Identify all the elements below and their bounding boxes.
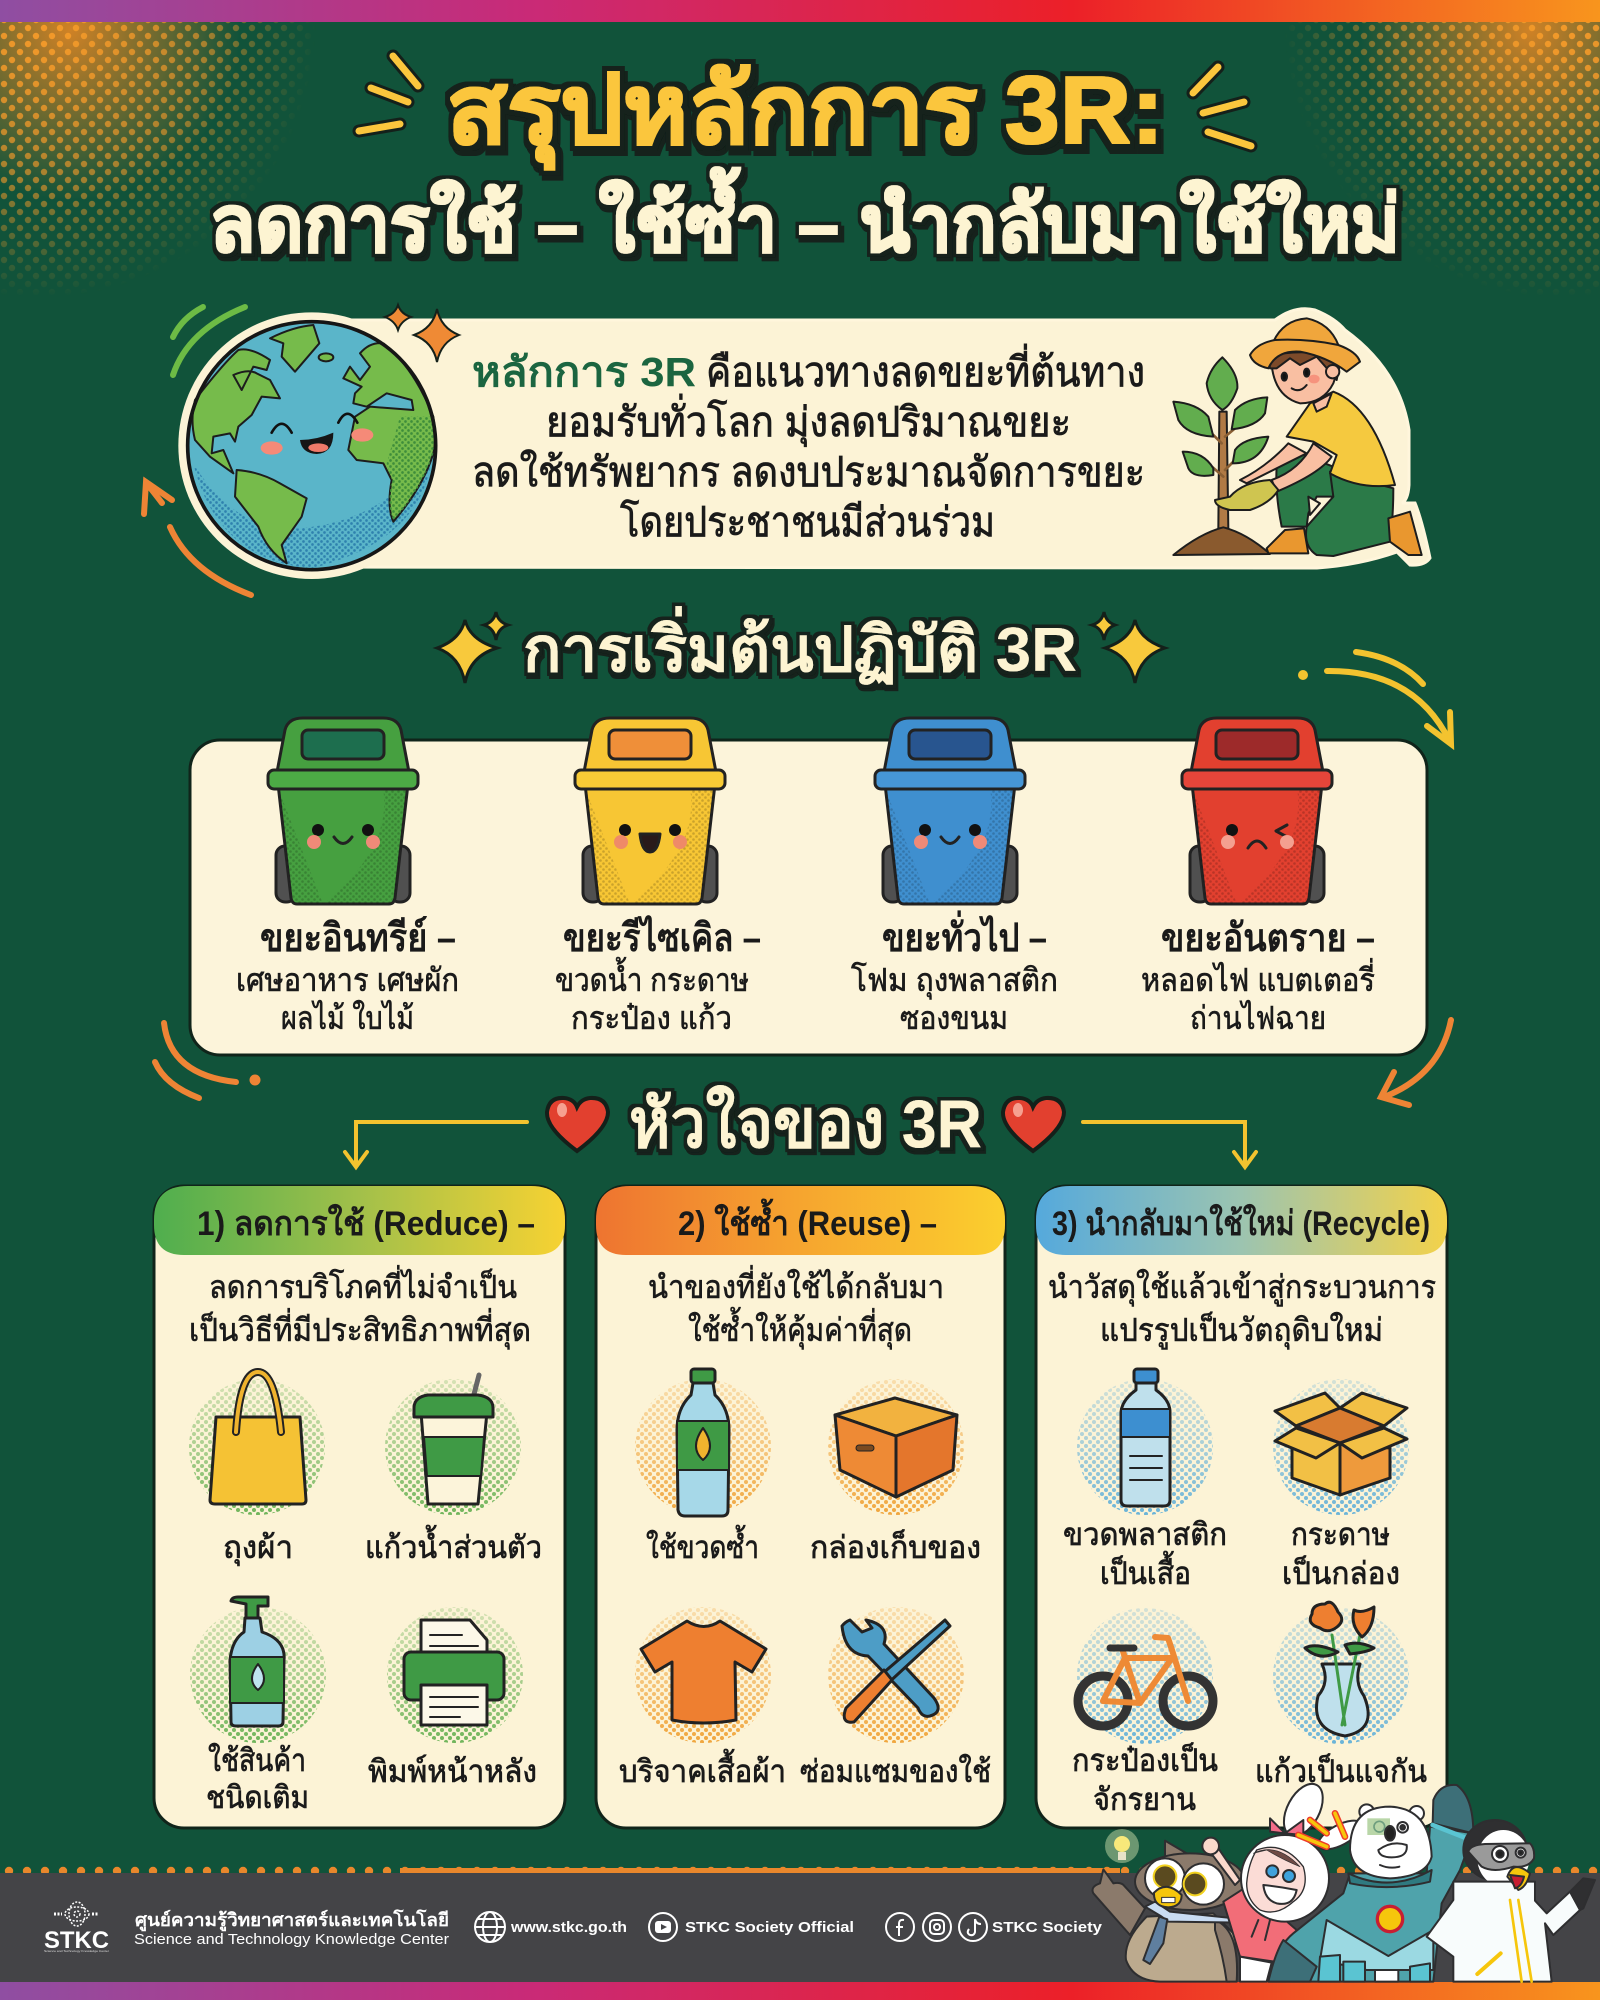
- label: recyclable waste: กระป๋อง แก้ว: [571, 1000, 732, 1036]
- item: reuse bottle: [635, 1369, 771, 1565]
- header: reduce: [154, 1186, 565, 1255]
- item: plastic bottle to shirt: เป็นเสื้อ: [1100, 1551, 1191, 1591]
- title line 1: สรุปหลักการ 3R:: [447, 57, 1164, 170]
- organization name: Science and Technology Knowledge Center: [134, 1931, 449, 1948]
- label: hazardous waste: ถ่านไฟฉาย: [1190, 1000, 1326, 1036]
- icon: green bin: [268, 718, 418, 904]
- header: reuse: [596, 1186, 1005, 1255]
- icon: heart right: [1003, 1098, 1064, 1151]
- header: reuse: 2) ใช้ซ้ำ (Reuse) –: [678, 1198, 937, 1243]
- arrow right to cards: [1083, 1122, 1256, 1167]
- icon: sparkles right: [1092, 612, 1165, 683]
- description: reduce: [189, 1265, 531, 1350]
- item: print double sided: พิมพ์หน้าหลัง: [368, 1754, 537, 1789]
- label: recyclable waste: ขยะรีไซเคิล –: [563, 915, 761, 960]
- description: recycle: แปรรูปเป็นวัตถุดิบใหม่: [1100, 1311, 1383, 1350]
- item: personal cup: [365, 1375, 542, 1565]
- item: can to bicycle: [1072, 1608, 1218, 1817]
- title line 2: ลดการใช้ – ใช้ซ้ำ – นำกลับมาใช้ใหม่: [210, 167, 1400, 268]
- logo STKC: Science and Technology Knowledge Center: [44, 1949, 109, 1953]
- icon: blue bin: [875, 718, 1025, 904]
- footer: [0, 1862, 1600, 2000]
- heading text: การเริ่มต้นปฏิบัติ 3R: [523, 606, 1077, 685]
- orange arcs bottom left: [155, 1023, 258, 1098]
- label: organic waste: ผลไม้ ใบไม้: [281, 1000, 414, 1036]
- title burst rays right: [1193, 67, 1251, 146]
- icon: orange sparkles: [385, 305, 459, 362]
- description: reduce: เป็นวิธีที่มีประสิทธิภาพที่สุด: [189, 1308, 531, 1350]
- icon: sparkles left: [437, 612, 508, 683]
- youtube: STKC Society Official: [685, 1919, 854, 1936]
- panel: reduce: [154, 1186, 565, 1828]
- header: reduce: 1) ลดการใช้ (Reduce) –: [197, 1203, 535, 1243]
- label: organic waste: เศษอาหาร เศษผัก: [236, 962, 459, 998]
- icon: green motion arcs: [173, 307, 245, 375]
- item: storage box: [810, 1379, 981, 1565]
- item: cloth bag: ถุงผ้า: [223, 1530, 293, 1567]
- item: can to bicycle: กระป๋องเป็น: [1072, 1742, 1218, 1778]
- item: refill bottle: [190, 1597, 326, 1815]
- item: glass to vase: แก้วเป็นแจกัน: [1255, 1753, 1427, 1789]
- label: hazardous waste: ขยะอันตราย –: [1161, 917, 1375, 960]
- mascot: polar bear in teal suit: [1268, 1785, 1473, 1982]
- arrow left to cards: [345, 1122, 527, 1167]
- logo STKC: STKC: [44, 1927, 109, 1954]
- panel: reuse: [596, 1186, 1005, 1828]
- title burst rays left: [359, 56, 418, 131]
- heading text: หัวใจของ 3R: [629, 1084, 982, 1162]
- section heading: heart of 3R: [547, 1084, 1064, 1162]
- orange curved arrow left of earth: [144, 482, 251, 595]
- panel: cream band: [313, 309, 1430, 568]
- item: refill bottle: ชนิดเติม: [206, 1780, 309, 1815]
- youtube: [649, 1913, 854, 1941]
- item: reuse bottle: ใช้ขวดซ้ำ: [646, 1525, 759, 1565]
- organization name: [134, 1909, 449, 1948]
- item: t-shirt: [619, 1607, 786, 1789]
- bottom gradient bar: [0, 1982, 1600, 2000]
- intro text: ลดใช้ทรัพยากร ลดงบประมาณจัดการขยะ: [472, 449, 1145, 495]
- description: recycle: [1048, 1269, 1436, 1350]
- intro text: [472, 344, 1145, 545]
- icon: farmer planting tree: [1173, 318, 1422, 556]
- label: general waste: ขยะทั่วไป –: [882, 910, 1047, 960]
- icon: heart left: [547, 1098, 608, 1151]
- intro text: หลักการ 3R: [472, 349, 696, 395]
- halftone corner left: [0, 22, 309, 292]
- mascots: [1092, 1777, 1595, 1982]
- panel: waste bins: [190, 718, 1427, 1055]
- item: plastic bottle to shirt: [1063, 1369, 1227, 1591]
- description: reduce: ลดการบริโภคที่ไม่จำเป็น: [209, 1265, 517, 1305]
- header: recycle: 3) นำกลับมาใช้ใหม่ (Recycle): [1052, 1203, 1430, 1243]
- footer scallop strip: [0, 1862, 1600, 1873]
- mascot: penguin in lab suit: [1427, 1820, 1595, 1982]
- halftone corner right: [1290, 22, 1600, 292]
- item: print double sided: [368, 1607, 537, 1789]
- item: repair tools: [800, 1607, 991, 1789]
- label: organic waste: [236, 915, 459, 1036]
- item: t-shirt: บริจาคเสื้อผ้า: [619, 1749, 786, 1789]
- item: plastic bottle to shirt: ขวดพลาสติก: [1063, 1517, 1227, 1552]
- item: paper to box: เป็นกล่อง: [1282, 1555, 1400, 1591]
- label: general waste: โฟม ถุงพลาสติก: [851, 962, 1058, 1000]
- yellow curved arrow top right: [1301, 652, 1451, 744]
- description: reuse: [648, 1265, 944, 1350]
- website: [475, 1912, 627, 1942]
- section heading: starting 3R: [437, 606, 1165, 685]
- top gradient bar: [0, 0, 1600, 22]
- item: refill bottle: ใช้สินค้า: [208, 1743, 306, 1778]
- panel: recycle: [1036, 1186, 1447, 1828]
- icon: red bin: [1182, 718, 1332, 904]
- logo STKC: [44, 1902, 109, 1954]
- item: paper to box: [1273, 1379, 1409, 1591]
- label: hazardous waste: หลอดไฟ แบตเตอรี่: [1141, 958, 1375, 998]
- footer bar: [0, 1873, 1600, 1982]
- label: recyclable waste: [555, 915, 761, 1036]
- header: recycle: [1036, 1186, 1447, 1255]
- item: personal cup: แก้วน้ำส่วนตัว: [365, 1525, 542, 1565]
- website: www.stkc.go.th: [510, 1919, 627, 1936]
- organization name: ศูนย์ความรู้วิทยาศาสตร์และเทคโนโลยี: [135, 1909, 449, 1932]
- intro panel: [173, 305, 1430, 579]
- social icons: STKC Society: [992, 1919, 1103, 1936]
- description: reuse: ใช้ซ้ำให้คุ้มค่าที่สุด: [688, 1307, 912, 1350]
- icon: light bulb: [1105, 1829, 1139, 1863]
- mascot: owl: [1092, 1838, 1245, 1982]
- intro text: โดยประชาชนมีส่วนร่วม: [620, 499, 995, 545]
- item: cloth bag: [189, 1372, 325, 1567]
- intro text: คือแนวทางลดขยะที่ต้นทาง: [706, 344, 1145, 395]
- social icons: [886, 1913, 1103, 1941]
- description: recycle: นำวัสดุใช้แล้วเข้าสู่กระบวนการ: [1048, 1269, 1436, 1307]
- item: storage box: กล่องเก็บของ: [810, 1529, 981, 1565]
- label: general waste: ซองขนม: [900, 1000, 1008, 1036]
- orange curved arrow bottom right: [1381, 1020, 1451, 1105]
- label: general waste: [851, 910, 1058, 1036]
- mascot: rabbit girl: [1223, 1777, 1366, 1982]
- label: organic waste: ขยะอินทรีย์ –: [260, 915, 456, 960]
- panel background: [190, 740, 1427, 1055]
- label: hazardous waste: [1141, 917, 1375, 1036]
- item: repair tools: ซ่อมแซมของใช้: [800, 1754, 991, 1789]
- item: can to bicycle: จักรยาน: [1093, 1782, 1196, 1817]
- icon: yellow bin: [575, 718, 725, 904]
- description: reuse: นำของที่ยังใช้ได้กลับมา: [648, 1265, 944, 1305]
- item: glass to vase: [1255, 1602, 1427, 1789]
- icon: earth: [178, 312, 445, 579]
- intro text: ยอมรับทั่วโลก มุ่งลดปริมาณขยะ: [546, 394, 1071, 447]
- item: paper to box: กระดาษ: [1291, 1517, 1390, 1552]
- label: recyclable waste: ขวดน้ำ กระดาษ: [555, 957, 749, 998]
